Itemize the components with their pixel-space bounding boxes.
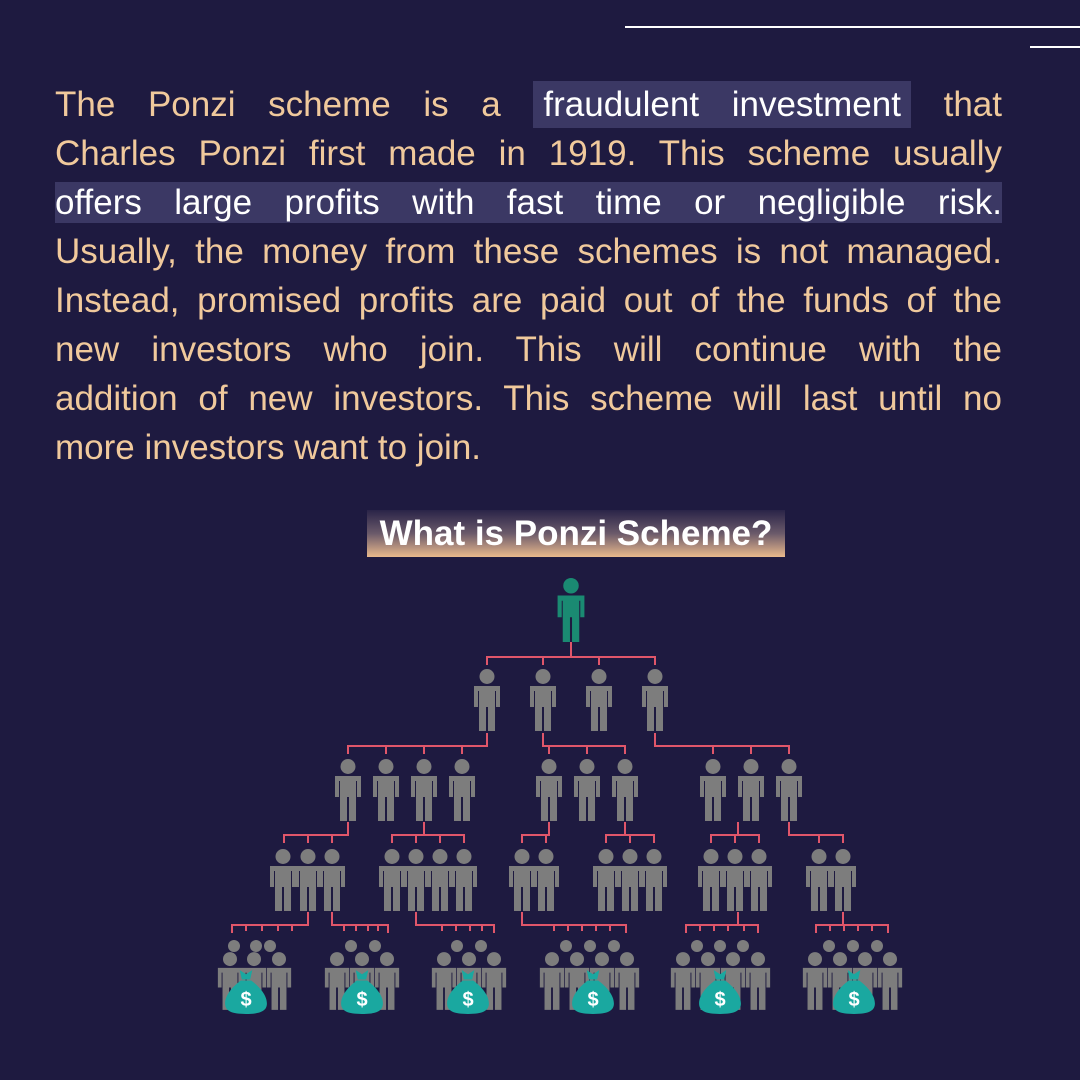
decorative short line [1030, 46, 1080, 48]
text block: description: new investors who join. This will continue with the [55, 330, 1002, 369]
text block: description: Charles Ponzi first made in 1919. This scheme usually [55, 134, 1002, 173]
text block: description: Usually, the money from these schemes is not managed. [55, 232, 1002, 271]
icon: top person (green) [558, 578, 584, 642]
level 3 people [270, 849, 856, 911]
level 4 clusters with money bags: $ [848, 989, 860, 1011]
connectors [232, 642, 888, 933]
text block: description [55, 81, 1002, 467]
level 4 clusters with money bags: $ [240, 989, 252, 1011]
level 4 clusters with money bags: $ [462, 989, 474, 1011]
decorative top line [625, 26, 1080, 28]
text block: description: The Ponzi scheme is a fraudulent investment that [55, 85, 1002, 124]
level 4 clusters with money bags: $ [587, 989, 599, 1011]
heading: What is Ponzi Scheme? [380, 514, 772, 553]
text block: description: addition of new investors. This scheme will last until no [55, 379, 1002, 418]
level 4 clusters with money bags: $ [714, 989, 726, 1011]
level 1 people [474, 669, 668, 731]
level 4 clusters with money bags: $ [356, 989, 368, 1011]
text block: description: more investors want to join. [55, 428, 481, 467]
text block: description: offers large profits with fast time or negligible risk. [55, 183, 1002, 222]
level 2 people [335, 759, 802, 821]
text block: description: Instead, promised profits are paid out of the funds of the [55, 281, 1002, 320]
level 4 clusters with money bags [218, 940, 902, 1014]
